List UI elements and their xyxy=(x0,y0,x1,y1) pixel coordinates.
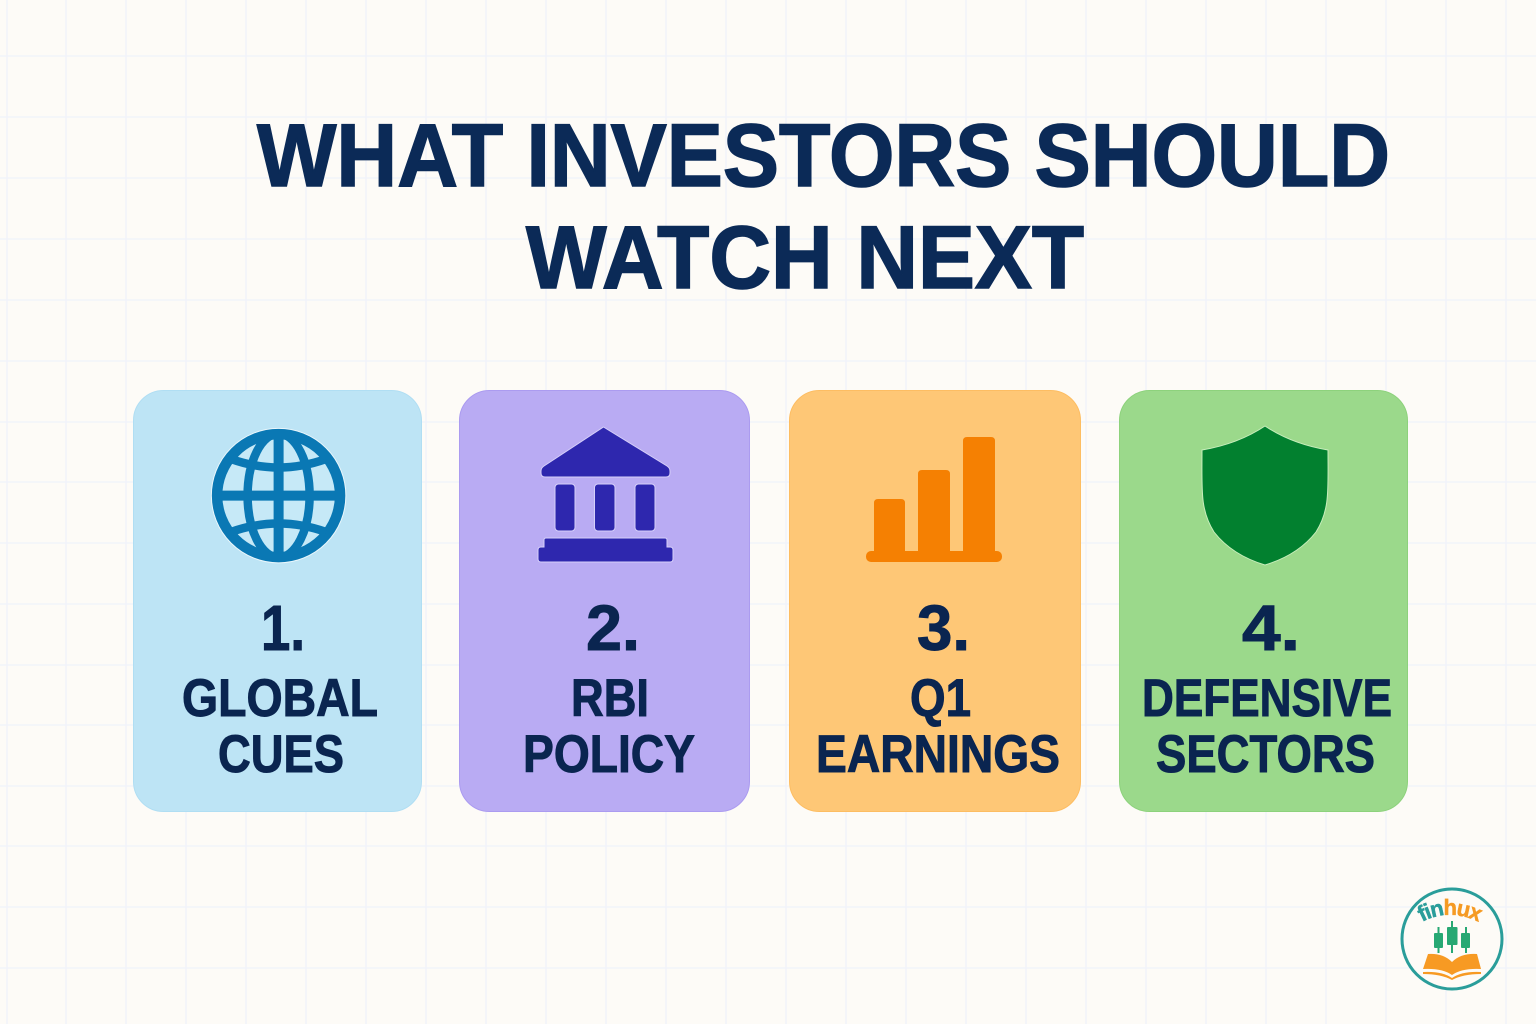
number 1: 1. xyxy=(261,592,305,664)
label: rbi policy: RBI xyxy=(571,669,649,728)
panel: rbi policy xyxy=(460,390,750,812)
number 4: 4. xyxy=(1242,592,1300,664)
icon: bar chart xyxy=(866,437,1002,562)
logo open book xyxy=(1423,954,1481,980)
number 2: 2. xyxy=(586,592,640,664)
icon: globe xyxy=(212,429,346,563)
panel: q1 earnings xyxy=(790,390,1080,812)
title: WHAT INVESTORS SHOULD xyxy=(257,105,1390,205)
icon: bank building xyxy=(538,427,673,562)
logo: finhux xyxy=(1400,888,1504,990)
icon: shield xyxy=(1202,426,1328,565)
number 3: 3. xyxy=(917,592,970,664)
title xyxy=(257,105,1390,307)
label: global cues: GLOBAL xyxy=(182,669,378,728)
panel: defensive sectors xyxy=(1120,390,1408,812)
logo wordmark: finhux xyxy=(1417,898,1483,922)
label: defensive sectors: DEFENSIVE xyxy=(1142,669,1392,728)
label: global cues: CUES xyxy=(218,725,344,784)
label: defensive sectors xyxy=(1142,669,1392,784)
label: defensive sectors: SECTORS xyxy=(1156,725,1375,784)
label: q1 earnings: Q1 xyxy=(910,669,971,728)
label: rbi policy xyxy=(523,669,695,784)
label: global cues xyxy=(182,669,378,784)
label: q1 earnings: EARNINGS xyxy=(816,725,1060,784)
label: q1 earnings xyxy=(816,669,1060,784)
logo candlesticks xyxy=(1434,921,1470,953)
label: rbi policy: POLICY xyxy=(523,725,695,784)
panel: global cues xyxy=(134,390,422,812)
title: WATCH NEXT xyxy=(526,207,1084,307)
